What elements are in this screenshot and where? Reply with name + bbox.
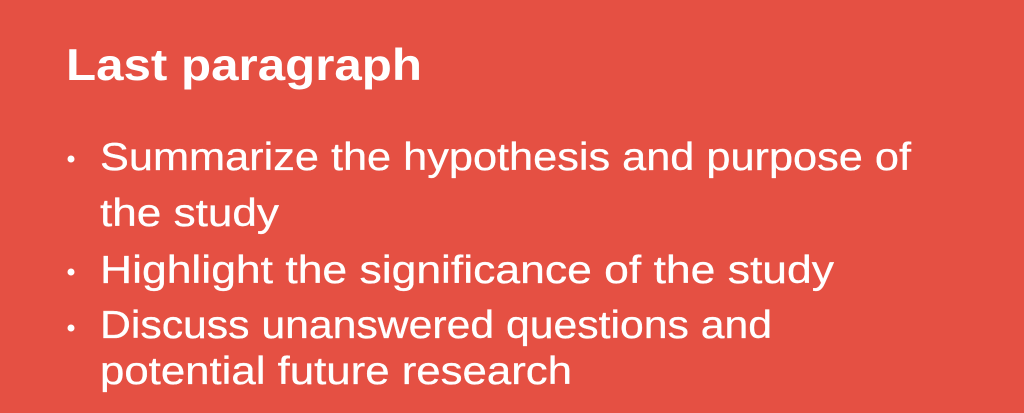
bullet 3 bbox=[68, 304, 772, 393]
bullet 3: Discuss unanswered questions and bbox=[100, 304, 772, 347]
bullet 3: potential future research bbox=[100, 350, 572, 393]
bullet 1: the study bbox=[100, 192, 280, 235]
bullet 1 bbox=[68, 136, 911, 235]
bullet list bbox=[68, 136, 911, 393]
bullet 2: Highlight the significance of the study bbox=[100, 249, 835, 292]
bullet 1: Summarize the hypothesis and purpose of bbox=[100, 136, 911, 179]
title: Last paragraph bbox=[66, 41, 422, 90]
